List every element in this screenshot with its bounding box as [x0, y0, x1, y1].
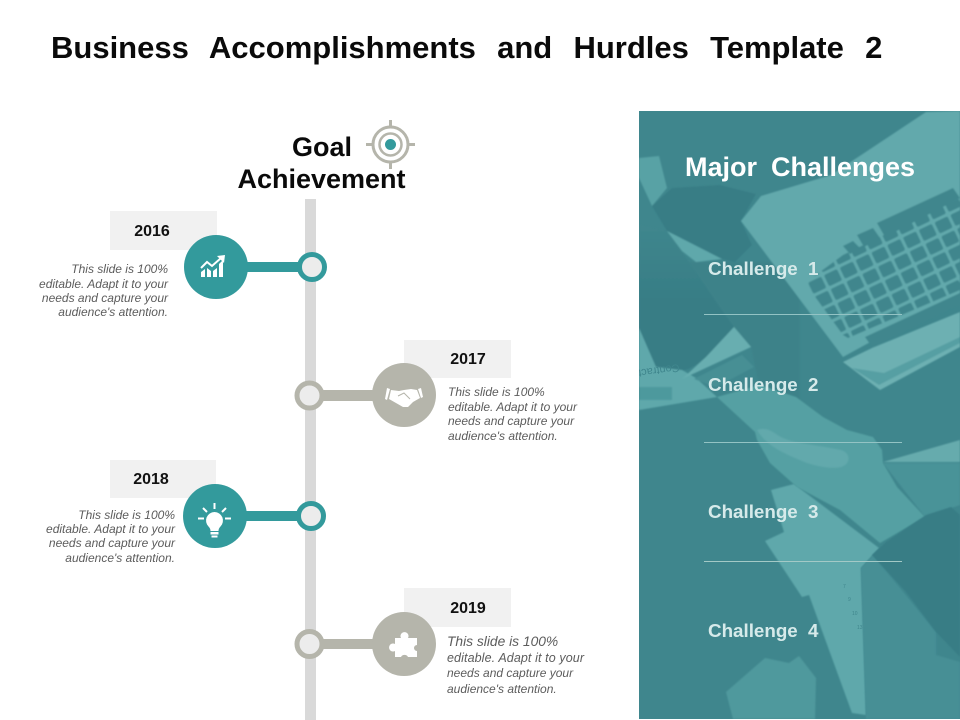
panel photo: ruler numbers: 7 [843, 584, 846, 590]
milestone: 2016: 2016 [134, 223, 170, 240]
milestone: 2017: This slide is 100% [448, 385, 545, 399]
challenge 4: Challenge 4 [708, 620, 819, 641]
panel photo: right sleeve [872, 507, 960, 657]
milestone: 2016: audience's attention. [58, 305, 168, 319]
panel photo: ruler numbers: 9 [848, 597, 851, 603]
milestone: 2016: needs and capture your [42, 291, 169, 305]
milestone: 2018: 2018 [133, 471, 169, 488]
milestone: 2016: editable. Adapt it to your [39, 277, 169, 291]
milestone: 2018: needs and capture your [49, 536, 176, 550]
milestone: 2018: editable. Adapt it to your [46, 522, 176, 536]
milestone: 2018 [46, 460, 324, 565]
panel photo: ruler numbers: 10 [852, 611, 858, 617]
icon: light bulb [198, 503, 231, 538]
milestone: 2019: needs and capture your [447, 666, 574, 680]
milestone: 2018: This slide is 100% [78, 508, 175, 522]
milestone: 2019: This slide is 100% [447, 634, 558, 649]
milestone: 2017: 2017 [450, 351, 486, 368]
milestone: 2019 [297, 588, 585, 696]
heading: goal achievement: Goal [292, 132, 352, 162]
milestone: 2017: editable. Adapt it to your [448, 400, 578, 414]
title: Business Accomplishments and Hurdles Template 2 [51, 30, 882, 65]
heading: goal achievement [237, 132, 406, 194]
panel heading: Major Challenges [685, 152, 915, 182]
milestone: 2019: audience's attention. [447, 682, 557, 696]
panel photo: table tone and wedge [861, 440, 960, 719]
milestone: 2017: needs and capture your [448, 414, 575, 428]
icon: handshake [385, 388, 423, 407]
panel photo: fist [726, 656, 816, 719]
panel photo: clasped fingers [757, 429, 848, 468]
milestone: 2016: This slide is 100% [71, 262, 168, 276]
challenge 3: Challenge 3 [708, 501, 818, 522]
milestone: 2016 [39, 211, 324, 319]
milestone: 2019: 2019 [450, 600, 486, 617]
panel photo: handshake [717, 385, 925, 543]
timeline spine [305, 199, 316, 720]
icon: puzzle piece [389, 632, 417, 657]
panel photo: ruler numbers: 13 [857, 625, 863, 631]
heading: goal achievement: Achievement [237, 164, 406, 194]
milestone: 2018: audience's attention. [65, 551, 175, 565]
panel photo: paper [765, 484, 879, 715]
icon: growth chart [201, 255, 225, 277]
panel photo: ruler numbers [843, 584, 863, 631]
challenge 2: Challenge 2 [708, 374, 818, 395]
icon: target [366, 120, 415, 169]
challenge 1: Challenge 1 [708, 258, 818, 279]
panel photo: contract label: Contract [637, 361, 680, 379]
panel photo: laptop [741, 111, 960, 390]
panel: major challenges [637, 111, 960, 719]
milestone: 2017: audience's attention. [448, 429, 558, 443]
milestone: 2019: editable. Adapt it to your [447, 651, 585, 665]
milestone: 2017 [297, 340, 578, 443]
panel photo: jacket, notebook and left sleeve [639, 156, 754, 410]
